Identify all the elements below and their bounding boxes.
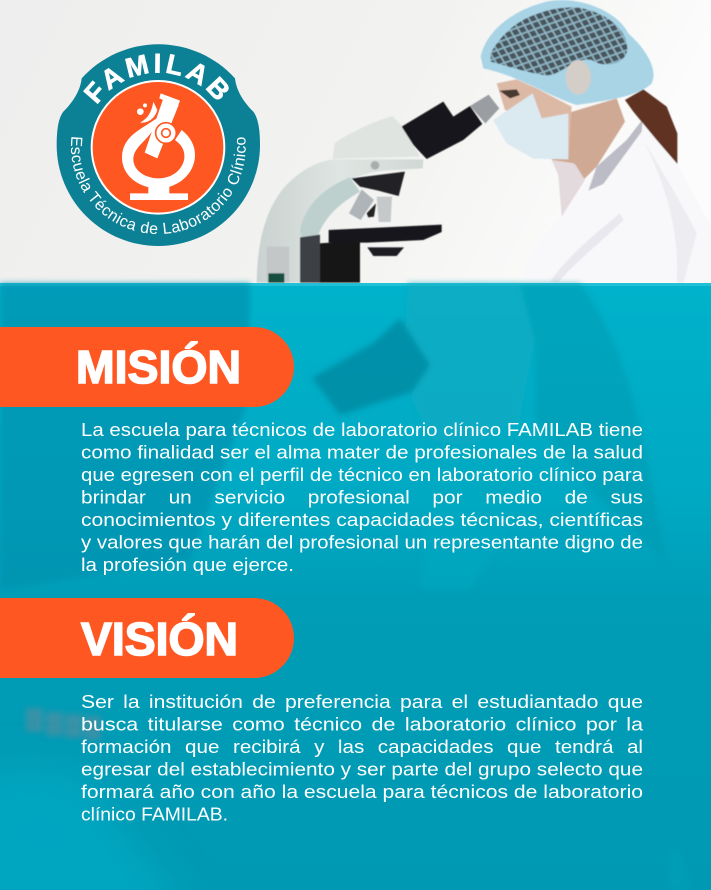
text block: misión: conocimientos y diferentes capacidades técnicas, científicas — [81, 509, 643, 530]
orange medallion — [92, 81, 224, 214]
heading pill: misión — [0, 327, 294, 407]
logo tagline: Escuela Técnica de Laboratorio Clínico — [70, 137, 246, 234]
teal section background with faded photo — [0, 283, 711, 890]
badge shape — [57, 44, 260, 246]
text block: misión: que egresen con el perfil de técnico en laboratorio clínico para — [81, 464, 644, 485]
text block: misión — [81, 419, 644, 575]
text block: misión: y valores que harán del profesional un representante digno de — [81, 532, 643, 552]
text block: visión — [81, 691, 644, 824]
text block: visión: formación que recibirá y las capacidades que tendrá al — [81, 736, 643, 757]
heading pill: misión: MISIÓN — [76, 341, 241, 393]
text block: visión: egresar del establecimiento y ser parte del grupo selecto que — [81, 758, 643, 780]
text block: misión: brindar un servicio profesional por medio de sus — [81, 486, 643, 508]
text block: misión: La escuela para técnicos de laboratorio clínico FAMILAB tiene — [81, 419, 643, 440]
logo: FAMILAB badge — [56, 44, 260, 246]
top photo: lab technician at microscope — [0, 0, 711, 283]
panel: visión — [0, 598, 644, 824]
panel: misión — [0, 327, 644, 575]
microscope — [257, 95, 499, 283]
technician — [481, 0, 711, 283]
text block: visión: Ser la institución de preferencia para el estudiantado que — [81, 691, 643, 712]
icon: microscope — [122, 93, 195, 200]
heading pill: visión: VISIÓN — [81, 613, 238, 665]
logo name: FAMILAB — [83, 54, 229, 104]
text block: visión: busca titularse como técnico de laboratorio clínico por la — [81, 714, 644, 734]
text block: visión: clínico FAMILAB. — [81, 804, 228, 824]
text block: misión: como finalidad ser el alma mater de profesionales de la salud — [81, 442, 643, 462]
text block: visión: formará año con año la escuela para técnicos de laboratorio — [81, 781, 643, 802]
heading pill: visión — [0, 598, 294, 678]
text block: misión: la profesión que ejerce. — [81, 554, 294, 575]
